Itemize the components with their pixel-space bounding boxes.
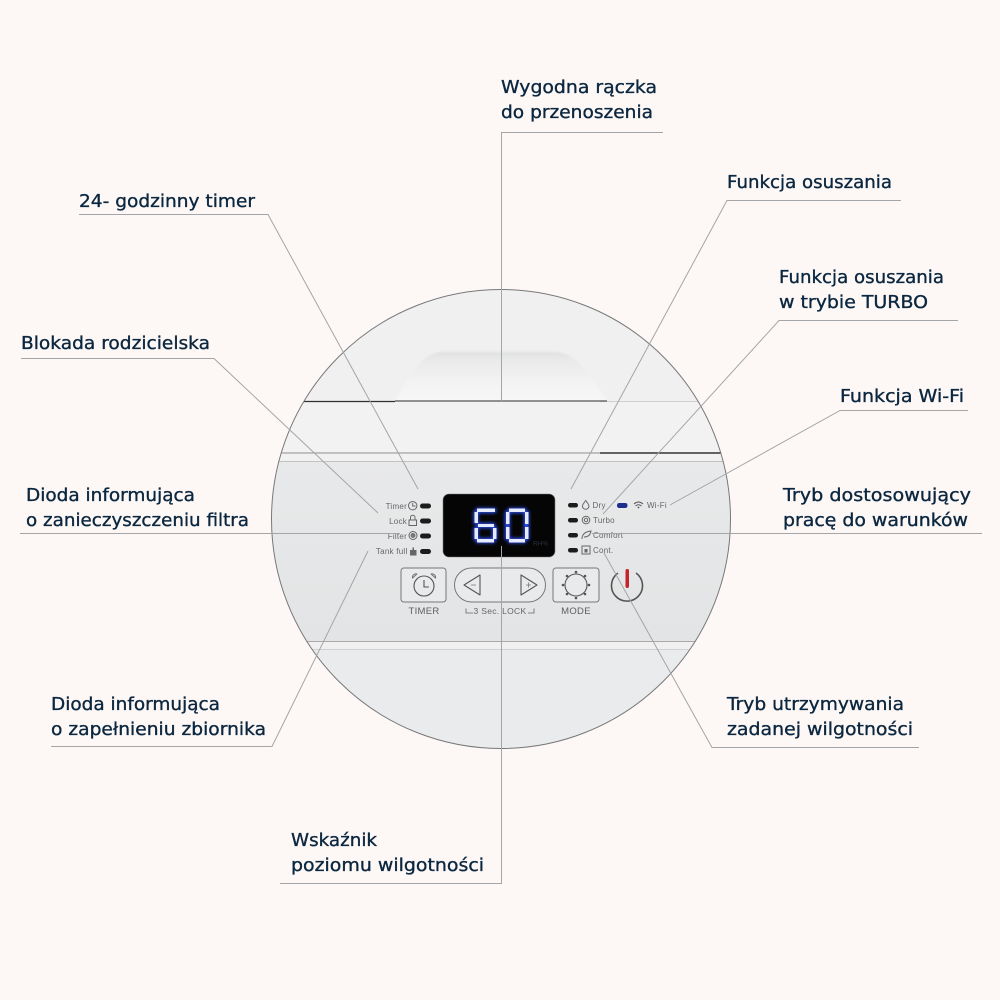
- button: arrows: 3 Sec. LOCK: [474, 606, 526, 616]
- callout: turbo: [603, 268, 958, 514]
- callout: parental lock: [21, 334, 378, 513]
- callout: filter diode: Dioda informująca: [26, 486, 195, 506]
- continuous indicator: Cont.: [593, 546, 613, 555]
- left indicators: [376, 502, 431, 556]
- callout: parental lock: Blokada rodzicielska: [21, 334, 210, 354]
- turbo indicator: Turbo: [593, 516, 615, 525]
- lock indicator: Lock: [389, 517, 408, 526]
- power button: [612, 569, 642, 601]
- carrying handle: [428, 352, 570, 359]
- wi-fi indicator: Wi-Fi: [647, 501, 667, 510]
- callout: tank diode: [51, 551, 368, 746]
- callout: handle: [501, 78, 663, 401]
- callout: wi-fi: [670, 387, 968, 505]
- right indicators: [568, 500, 667, 555]
- timer indicator: Timer: [386, 502, 407, 511]
- button: mode: [553, 568, 599, 617]
- callout: humidity hold: zadanej wilgotności: [727, 720, 913, 740]
- callout: dehumidify: Funkcja osuszania: [727, 173, 892, 193]
- callout: adaptive mode: pracę do warunków: [783, 511, 968, 531]
- callout: humidity level: poziomu wilgotności: [291, 856, 484, 876]
- callout: humidity hold: Tryb utrzymywania: [726, 695, 904, 715]
- product photo circle: [270, 288, 732, 749]
- dry indicator: Dry: [592, 501, 606, 510]
- display with humidity reading: [443, 494, 555, 557]
- callout: humidity hold: [604, 553, 919, 748]
- callout: turbo: Funkcja osuszania: [779, 268, 944, 288]
- digit 0: [506, 508, 528, 542]
- callout: adaptive mode: Tryb dostosowujący: [782, 486, 971, 506]
- digit 6 glow: [474, 508, 529, 543]
- callout: 24h timer: [79, 192, 418, 489]
- control panel: [376, 494, 667, 617]
- unit: RH%: [533, 540, 548, 548]
- callout: humidity level: Wskaźnik: [291, 831, 378, 851]
- button: arrows: [454, 568, 546, 616]
- button: timer: TIMER: [408, 606, 440, 617]
- callout: filter diode: [20, 486, 400, 534]
- callout: filter diode: o zanieczyszczeniu filtra: [26, 511, 249, 531]
- callout: handle: Wygodna rączka: [501, 78, 657, 98]
- callout: 24h timer: 24- godzinny timer: [79, 192, 256, 212]
- callout: turbo: w trybie TURBO: [779, 293, 928, 313]
- button: mode: MODE: [561, 606, 591, 617]
- callout: adaptive mode: [592, 486, 982, 534]
- button: timer: [401, 568, 446, 617]
- callout: handle: do przenoszenia: [501, 103, 653, 123]
- comfort indicator: Comfort: [593, 531, 624, 540]
- callout: humidity level: [280, 546, 502, 884]
- filter indicator: Filter: [388, 532, 407, 541]
- circle outline: [272, 290, 730, 748]
- digit 6: [474, 508, 496, 542]
- callout: tank diode: Dioda informująca: [51, 695, 220, 715]
- tank full indicator: Tank full: [376, 547, 408, 556]
- callout: dehumidify: [571, 173, 901, 489]
- callout: tank diode: o zapełnieniu zbiornika: [51, 720, 266, 740]
- callout: wi-fi: Funkcja Wi-Fi: [840, 387, 964, 407]
